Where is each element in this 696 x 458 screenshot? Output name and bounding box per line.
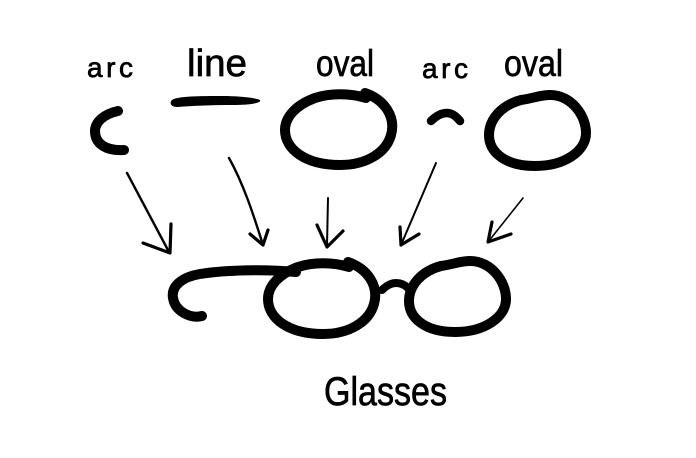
glasses right lens — [409, 261, 506, 332]
shape: second oval — [489, 95, 586, 166]
arrow: oval to right lens — [488, 198, 523, 242]
glasses bridge — [382, 283, 408, 290]
label: second oval: oval — [504, 43, 563, 84]
arrow: arc to bridge — [400, 163, 436, 245]
label: oval: oval — [316, 43, 374, 84]
arrow: oval to left lens — [317, 198, 343, 247]
glasses left lens — [268, 262, 375, 334]
shape: arc — [95, 111, 124, 150]
label: line: line — [187, 43, 247, 85]
caption: Glasses: Glasses — [324, 370, 447, 414]
shape: second arc — [431, 113, 460, 121]
shape: oval — [285, 93, 392, 165]
glasses temple — [173, 270, 296, 317]
label: arc: arc — [87, 52, 133, 83]
glasses: assembled drawing — [173, 261, 506, 334]
shape: line — [171, 96, 260, 107]
arrow: line to temple — [229, 158, 268, 245]
label: second arc: arc — [422, 53, 468, 84]
arrow: arc to temple hook — [127, 173, 171, 253]
